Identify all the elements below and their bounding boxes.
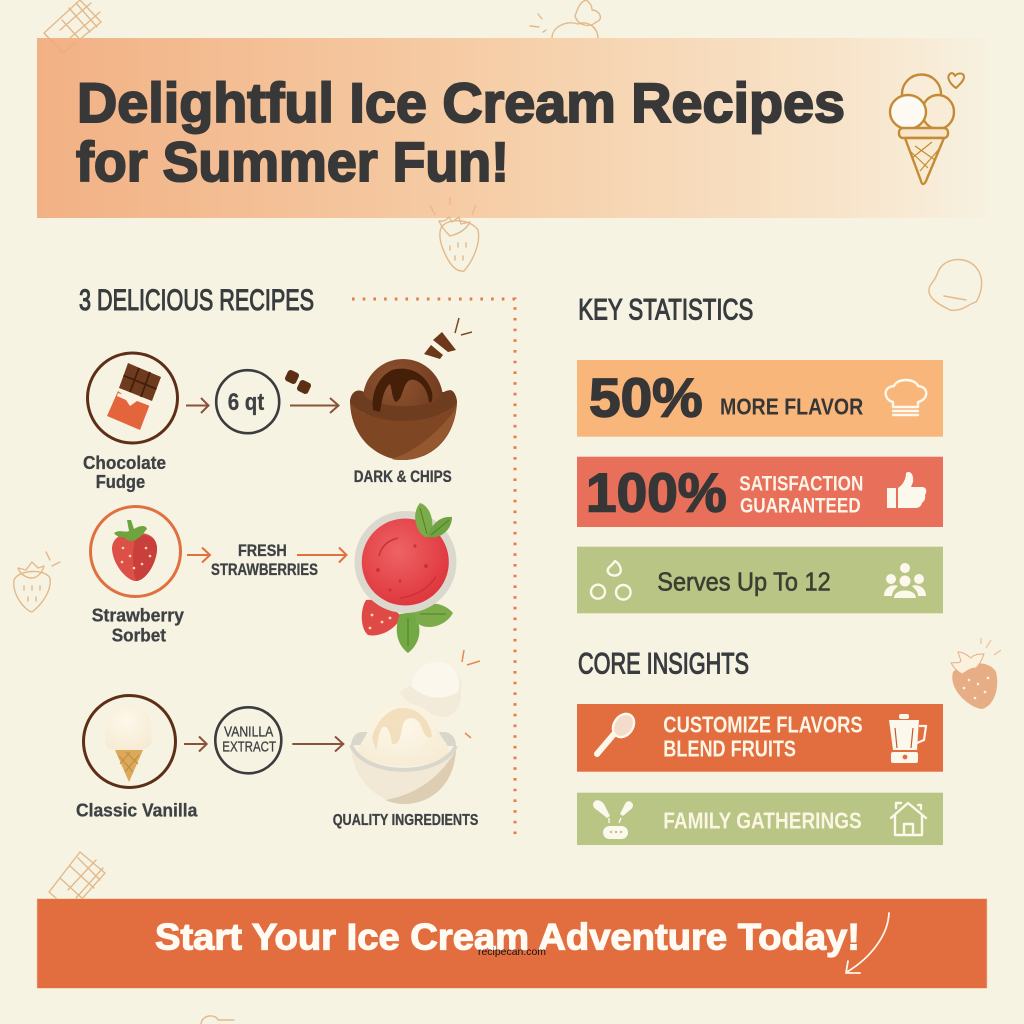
background doodle: strawberry bottom: [201, 1016, 234, 1024]
watermark: recipecan.com: [478, 946, 546, 958]
icon: house: [891, 803, 926, 835]
insight text: BLEND FRUITS: [663, 736, 796, 762]
background doodle: chocolate top left: [44, 0, 101, 53]
recipe row: chocolate fudge: [88, 318, 472, 460]
icon: vanilla bowl: [351, 650, 480, 804]
faint doodle showing through header: [44, 33, 476, 215]
recipe row: strawberry sorbet: [90, 503, 456, 653]
icon: chocolate bar circle: [88, 353, 178, 443]
icon: spoon: [597, 710, 638, 754]
insight bar: family gatherings: [577, 793, 943, 845]
stat label: GUARANTEED: [740, 494, 861, 518]
icon: chocolate bowl: [350, 318, 472, 460]
ingredient circle: EXTRACT: [222, 740, 276, 756]
call to action text: Start Your Ice Cream Adventure Today!: [155, 916, 860, 957]
stat value: 100%: [586, 462, 727, 524]
label: chocolate fudge: Fudge: [96, 472, 145, 492]
core insights heading: CORE INSIGHTS: [578, 647, 749, 680]
label: strawberry sorbet: Strawberry: [92, 606, 184, 626]
title: [76, 71, 845, 193]
key statistics heading: KEY STATISTICS: [578, 293, 753, 326]
stat bar: 100 percent: [577, 457, 943, 527]
icon: chocolate chips: [284, 369, 312, 395]
call to action banner: [37, 899, 987, 988]
label: classic vanilla: Classic Vanilla: [76, 801, 198, 821]
arrow: [292, 736, 343, 752]
insight text: [663, 711, 863, 762]
background doodle: strawberry top: [530, 0, 600, 38]
recipe row: classic vanilla: [84, 650, 480, 804]
ingredient label: STRAWBERRIES: [211, 561, 318, 579]
label: strawberry sorbet: Sorbet: [112, 626, 166, 646]
icon: strawberry circle: [90, 506, 180, 596]
icon: sorbet plate: [354, 503, 456, 653]
recipes heading: 3 DELICIOUS RECIPES: [79, 284, 314, 317]
insight text: FAMILY GATHERINGS: [663, 807, 862, 833]
ingredient label: [211, 542, 318, 579]
label: quality ingredients: QUALITY INGREDIENTS: [333, 812, 478, 829]
label: chocolate fudge: Chocolate: [83, 453, 166, 473]
stat label: [739, 472, 863, 518]
label: strawberry sorbet: [92, 606, 184, 646]
stat value: 50%: [589, 367, 703, 429]
quantity circle: 6 qt: [228, 389, 264, 416]
stat bar: serves: [577, 547, 943, 613]
background doodle: strawberry below header: [439, 217, 479, 271]
arrow: curved: [846, 913, 889, 973]
dotted separator: [352, 299, 515, 840]
label: dark and chips: DARK & CHIPS: [354, 468, 452, 486]
arrow: [297, 548, 346, 562]
icon: ice cream cone: [890, 73, 964, 184]
insight bar: customize flavors: [577, 704, 943, 772]
background doodle: scoop: [929, 260, 982, 310]
arrow: [187, 548, 210, 562]
title: Delightful Ice Cream Recipes: [77, 71, 845, 134]
background icon: watercolour strawberry: [951, 638, 1001, 709]
icon: thumbs up: [887, 472, 926, 508]
stat label: MORE FLAVOR: [720, 393, 864, 419]
insight text: CUSTOMIZE FLAVORS: [663, 711, 863, 737]
label: chocolate fudge: [83, 453, 166, 492]
ingredient circle: VANILLA: [224, 725, 274, 741]
title: for Summer Fun!: [76, 130, 509, 193]
background doodle: chocolate lower left: [49, 852, 105, 911]
icon: blender: [889, 714, 926, 763]
quantity circle: [216, 370, 279, 433]
icon: three drops: [591, 561, 631, 600]
icon: chef hat: [886, 380, 926, 415]
ingredient circle: [215, 707, 281, 773]
icon: vanilla cone circle: [84, 696, 176, 788]
background doodle: strawberry left: [14, 552, 60, 612]
arrow: [290, 398, 338, 413]
arrow: [184, 736, 207, 752]
icon: people group: [884, 563, 926, 598]
ingredient label: FRESH: [238, 542, 287, 560]
stat text: Serves Up To 12: [657, 567, 831, 597]
stat bar: 50 percent: [577, 360, 943, 437]
arrow: [186, 398, 208, 413]
stat label: SATISFACTION: [739, 472, 863, 496]
icon: scoops and bowl: [593, 800, 633, 839]
header banner: [37, 38, 987, 218]
